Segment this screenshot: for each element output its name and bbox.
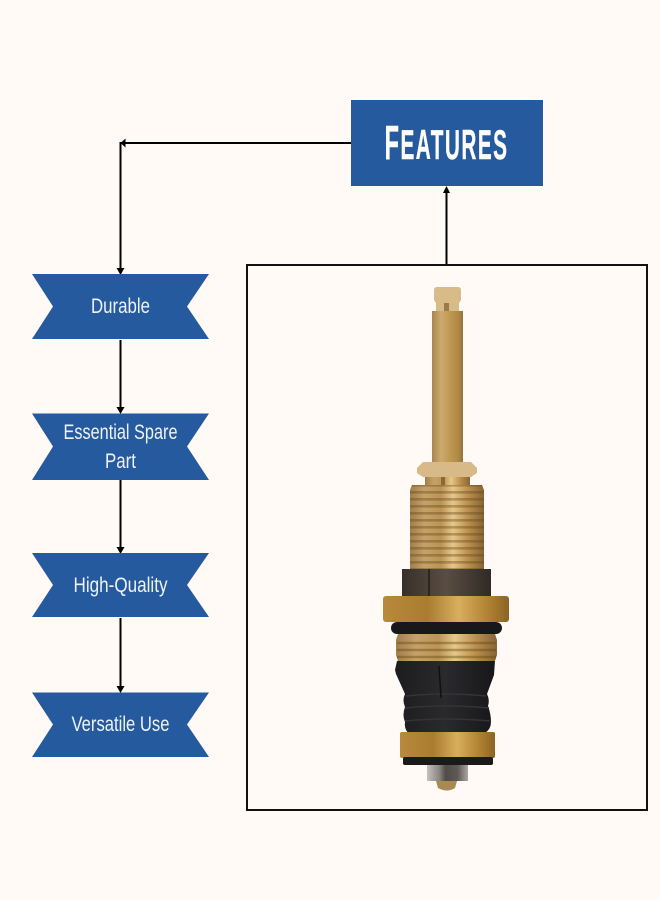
ribbon: durable: Durable [91, 295, 150, 318]
arrow: down to durable [116, 142, 124, 275]
heading: features [351, 100, 543, 186]
arrow: essential spare part to high-quality [116, 480, 124, 554]
arrow: product to features [443, 186, 450, 265]
o-ring [391, 622, 502, 634]
ribbon: high-quality [32, 553, 209, 617]
arrow: durable to essential spare part [116, 340, 124, 414]
heading: features: FEATURES [384, 117, 508, 170]
icon: brass valve cartridge [383, 287, 509, 790]
lower brass ring [400, 732, 495, 758]
ribbon: essential spare part: Part [105, 450, 136, 473]
dark hex body [402, 569, 491, 597]
lower thread [396, 634, 497, 661]
panel: product image frame [247, 265, 647, 810]
black plate [403, 757, 493, 765]
upper thread [410, 485, 484, 570]
ribbon: high-quality: High-Quality [74, 574, 168, 597]
arrow: high-quality to versatile use [116, 618, 124, 693]
hex nut and collar [417, 462, 477, 485]
ribbon: versatile use: Versatile Use [72, 713, 170, 736]
valve stem [432, 287, 463, 463]
ribbon: essential spare part: Essential Spare [64, 421, 178, 444]
ribbon: versatile use [32, 692, 209, 757]
ribbon: essential spare part [32, 414, 209, 480]
silver nut [427, 765, 468, 781]
brass flange [383, 596, 509, 622]
ribbon: durable [32, 274, 209, 339]
rubber seal [395, 661, 495, 733]
brass tip [436, 781, 457, 790]
arrow: features to left column [120, 138, 351, 148]
